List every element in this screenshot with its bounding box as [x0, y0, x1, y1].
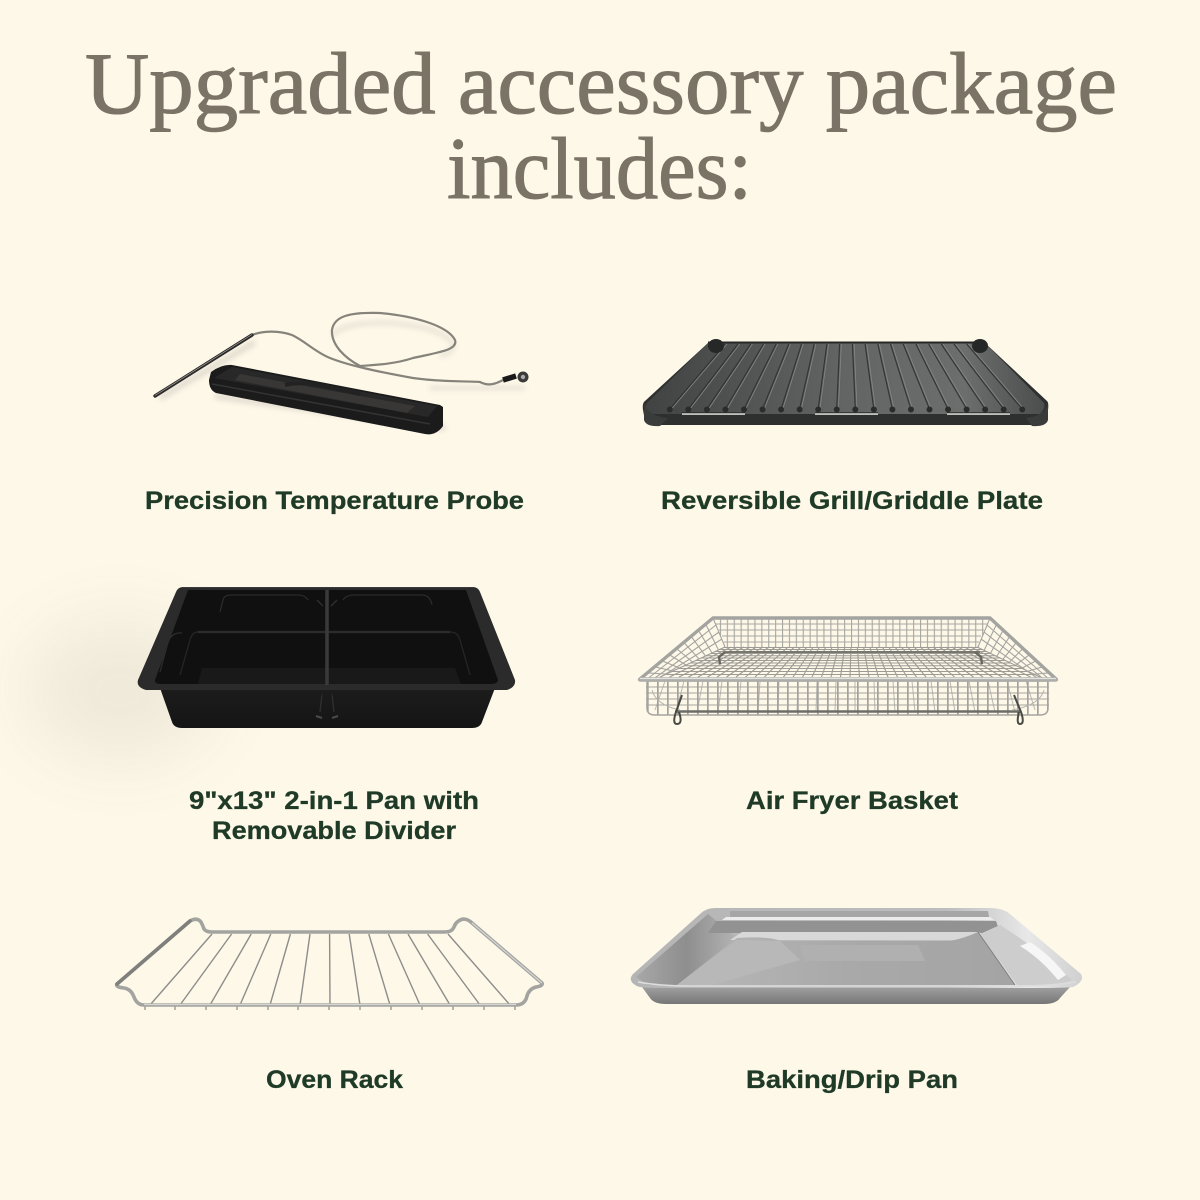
- label: Air Fryer Basket: [746, 787, 959, 815]
- icon: baking pan: [631, 908, 1082, 1004]
- icon: temperature probe and holder: [155, 313, 528, 434]
- icon: grill plate: [643, 339, 1048, 426]
- title: Upgraded accessory package: [85, 36, 1117, 133]
- panel: baking drip pan: [631, 908, 1082, 1094]
- icon: pan shadow: [25, 620, 215, 760]
- label: Baking/Drip Pan: [746, 1066, 958, 1094]
- wires seen through front: [655, 681, 1035, 712]
- basket floor: [640, 647, 1060, 677]
- icon: wire basket: [640, 618, 1060, 724]
- label: Reversible Grill/Griddle Plate: [661, 487, 1043, 515]
- rear feet: [719, 652, 982, 664]
- title: [85, 36, 1117, 218]
- rim: [640, 618, 1056, 679]
- feet: [674, 695, 1023, 724]
- panel: precision temperature probe: [145, 313, 528, 515]
- label: Oven Rack: [266, 1066, 403, 1094]
- panel: oven rack: [117, 919, 542, 1094]
- panel: 2-in-1 pan with divider: [25, 587, 515, 845]
- label: 9"x13" 2-in-1 Pan with: [189, 787, 479, 815]
- label: [189, 787, 479, 845]
- icon: oven rack: [117, 919, 542, 1010]
- panel: air fryer basket: [640, 618, 1060, 815]
- side walls: [646, 618, 1050, 680]
- icon: black pan: [138, 587, 515, 728]
- label: Precision Temperature Probe: [145, 487, 524, 515]
- panel: reversible grill griddle plate: [643, 339, 1048, 515]
- front wall: [647, 681, 1048, 715]
- label: Removable Divider: [212, 817, 456, 845]
- back wall: [713, 618, 990, 647]
- title: includes:: [447, 121, 752, 218]
